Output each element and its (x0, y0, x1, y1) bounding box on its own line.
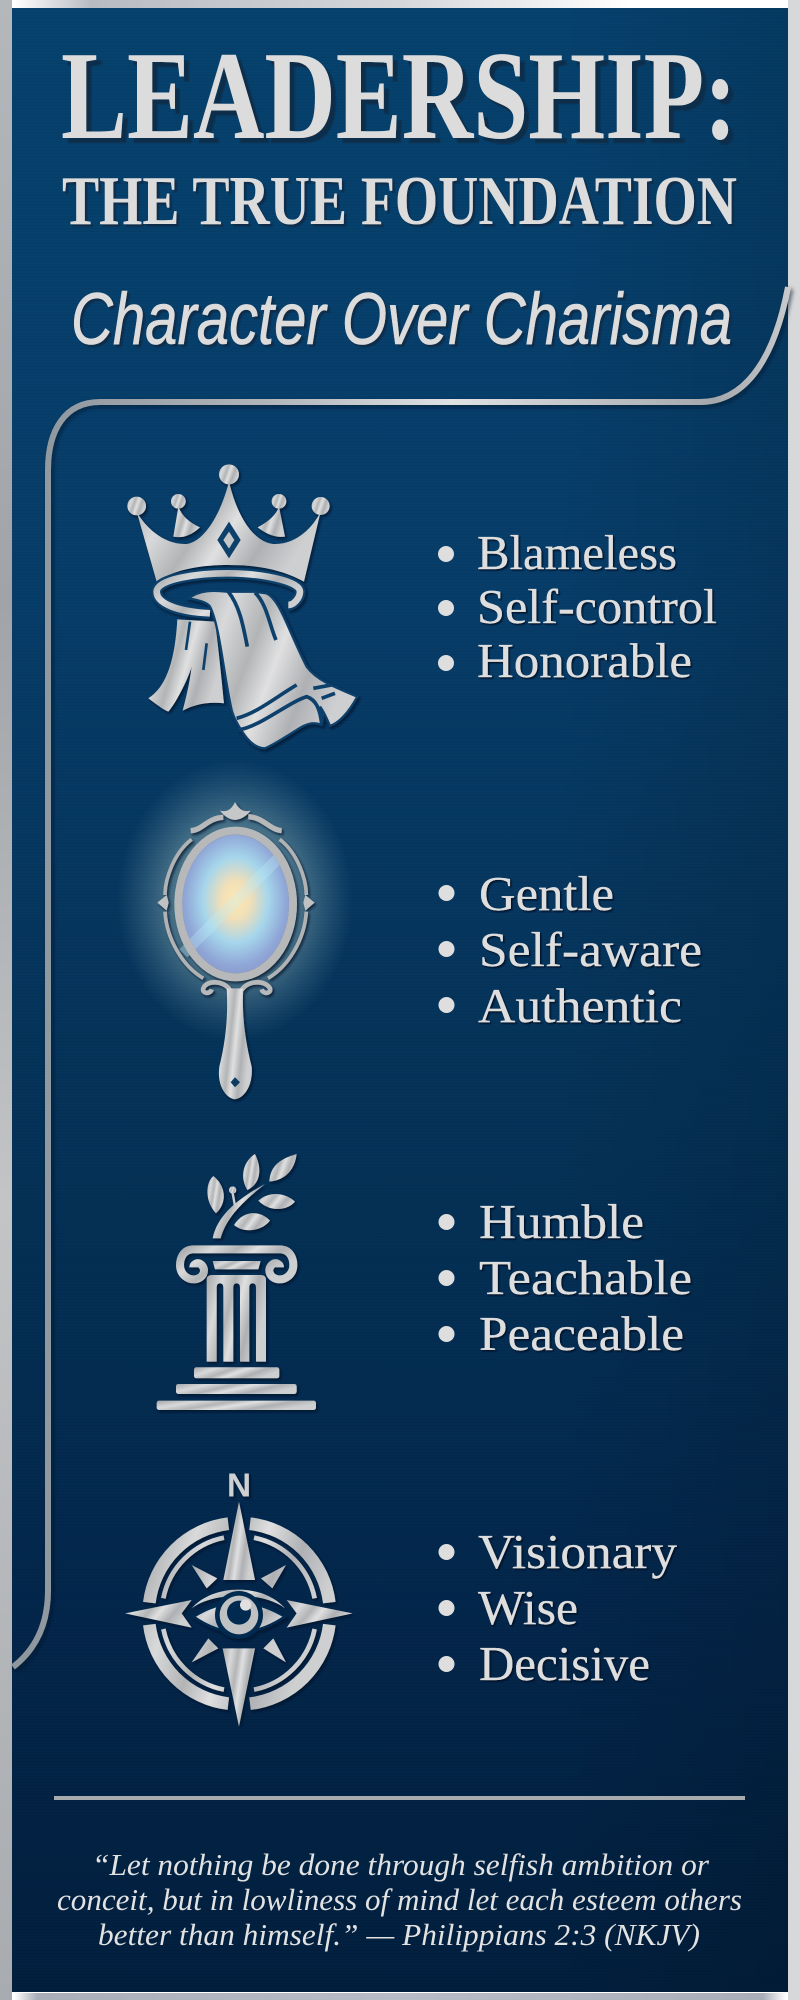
list: blameless, self-control, honorable: Honorable (477, 633, 692, 688)
list: humble, teachable, peaceable: Humble (479, 1194, 644, 1249)
list: humble, teachable, peaceable: Teachable (479, 1250, 692, 1305)
list: visionary, wise, decisive (438, 1524, 678, 1691)
list: blameless, self-control, honorable (438, 525, 717, 688)
list: blameless, self-control, honorable: Blameless (477, 525, 677, 580)
list: gentle, self-aware, authentic: Self-aware (479, 922, 702, 977)
list: gentle, self-aware, authentic: Authentic (478, 978, 682, 1033)
title (61, 27, 737, 240)
icon: compass with eye (125, 1468, 353, 1727)
list: visionary, wise, decisive: Decisive (479, 1636, 650, 1691)
icon: glowing hand mirror (117, 760, 353, 1099)
list: gentle, self-aware, authentic: Gentle (479, 866, 614, 921)
list: humble, teachable, peaceable (438, 1194, 692, 1361)
icon: crown and towel (127, 464, 357, 748)
list: humble, teachable, peaceable: Peaceable (479, 1306, 684, 1361)
footer divider (54, 1796, 745, 1800)
list: blameless, self-control, honorable: Self-control (477, 579, 717, 634)
bible quote (57, 1847, 742, 1952)
list: gentle, self-aware, authentic (438, 866, 702, 1033)
list: visionary, wise, decisive: Wise (478, 1580, 578, 1635)
compass north letter: N (227, 1468, 251, 1505)
list: visionary, wise, decisive: Visionary (478, 1524, 678, 1579)
icon: column with olive branch (157, 1154, 316, 1410)
bible quote: conceit, but in lowliness of mind let each esteem others (57, 1882, 742, 1917)
silver curved divider line (13, 287, 788, 1667)
bible quote: better than himself.” — Philippians 2:3 (NKJV) (98, 1917, 700, 1952)
bible quote: “Let nothing be done through selfish ambition or (92, 1847, 710, 1882)
